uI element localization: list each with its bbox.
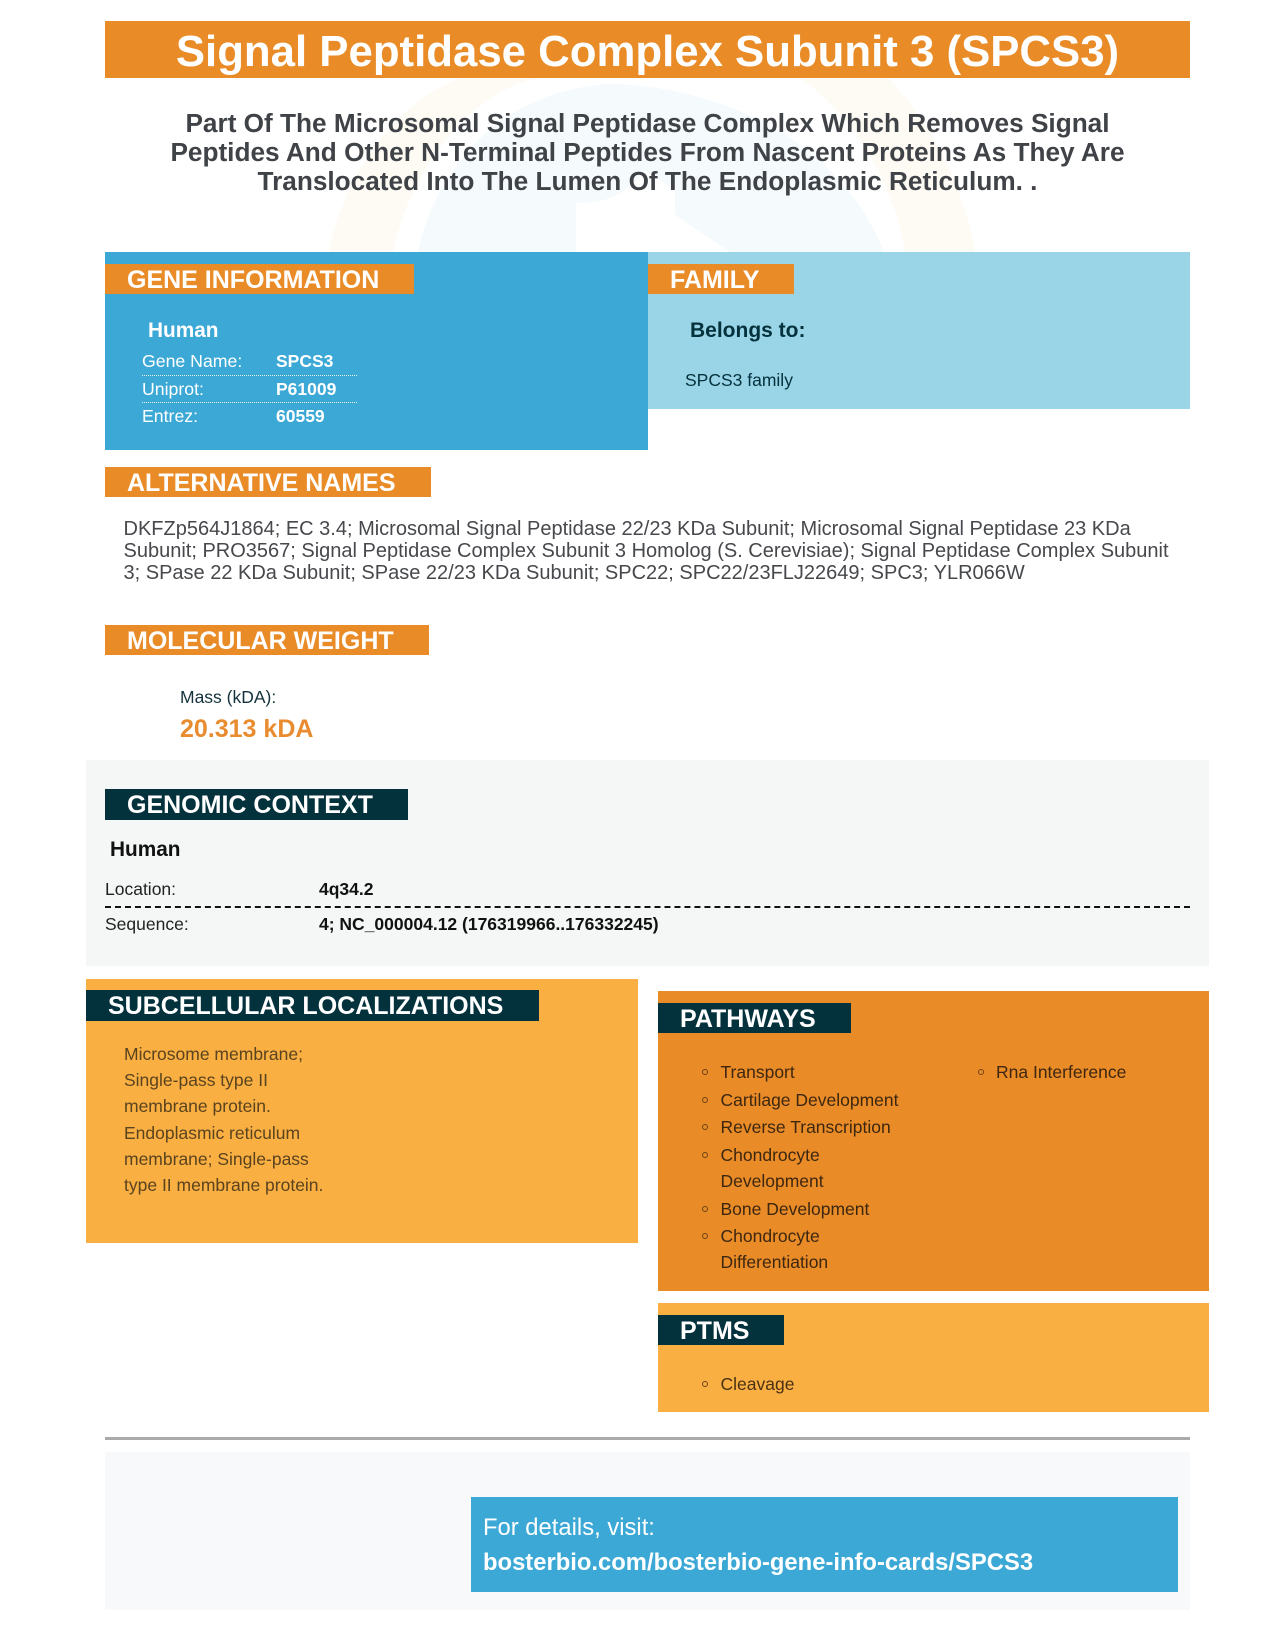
heading: gene information: GENE INFORMATION [127,266,379,294]
ptm list: Cleavage [720,1374,794,1394]
family value: SPCS3 family [685,370,793,390]
subtitle description: Peptides And Other N-Terminal Peptides From Nascent Proteins As They Are [170,137,1125,167]
species label: Human [110,838,180,861]
entrez row: 60559 [276,406,325,426]
entrez row [142,406,325,426]
subtitle description [170,108,1125,196]
pathway list: Reverse Transcription [720,1117,891,1137]
pathway list: Chondrocyte [720,1145,820,1165]
uniprot row [142,376,357,403]
panel: footer [105,1452,1190,1610]
panel: gene information [105,252,648,450]
alternative names text: Subunit; PRO3567; Signal Peptidase Complex Subunit 3 Homolog (S. Cerevisiae); Signal Peptidase Complex Subunit [124,540,1169,562]
location value: 4q34.2 [319,879,373,899]
title banner: Signal Peptidase Complex Subunit 3 (SPCS3) [176,27,1119,76]
pathway list [702,1062,1126,1272]
heading: subcellular localizations: SUBCELLULAR LOCALIZATIONS [108,992,503,1020]
pathway list: Transport [720,1062,795,1082]
subtitle description: Translocated Into The Lumen Of The Endoplasmic Reticulum. . [258,166,1037,196]
heading: alternative names: ALTERNATIVE NAMES [127,469,396,497]
heading: pathways [658,1003,851,1033]
pathway list: Development [720,1171,824,1191]
uniprot row: Uniprot: [142,379,204,399]
entrez row: Entrez: [142,406,198,426]
pathway list: Chondrocyte [720,1226,820,1246]
callout url: bosterbio.com/bosterbio-gene-info-cards/SPCS3 [483,1549,1033,1576]
localization text: membrane protein. [124,1096,271,1116]
location row: Location: [105,879,176,899]
heading: ptms [658,1315,784,1345]
watermark logo [329,78,975,252]
localization text: Microsome membrane; [124,1044,303,1064]
panel: pathways [658,991,1209,1291]
heading: pathways: PATHWAYS [680,1005,816,1033]
sequence value: 4; NC_000004.12 (176319966..176332245) [319,914,659,934]
heading: ptms: PTMS [680,1317,749,1345]
panel: subcellular localizations [86,979,638,1243]
sequence row: Sequence: [105,914,189,934]
localization text: Single-pass type II [124,1070,268,1090]
species label: Human [148,319,218,342]
mass value: 20.313 kDA [180,715,313,743]
alternative names text [124,518,1169,584]
alternative names text: 3; SPase 22 KDa Subunit; SPase 22/23 KDa Subunit; SPC22; SPC22/23FLJ22649; SPC3; YLR066W [124,562,1025,584]
pathway list: Differentiation [720,1252,828,1272]
callout intro text: For details, visit: [483,1514,655,1541]
subtitle description: Part Of The Microsomal Signal Peptidase Complex Which Removes Signal [185,108,1110,138]
pathway list: Rna Interference [996,1062,1126,1082]
callout: details link [471,1497,1178,1592]
localization text: type II membrane protein. [124,1175,323,1195]
heading: family [648,264,794,294]
mass label: Mass (kDA): [180,687,276,707]
panel: ptms [658,1303,1209,1412]
heading: molecular weight: MOLECULAR WEIGHT [127,627,394,655]
localization text: Endoplasmic reticulum [124,1123,300,1143]
panel: family [648,252,1190,409]
pathway list: Bone Development [720,1199,869,1219]
belongs to label: Belongs to: [690,319,806,342]
gene name row: Gene Name: [142,351,242,371]
panel: genomic context [86,760,1209,966]
heading: family: FAMILY [670,266,759,294]
localization text [124,1044,323,1195]
heading: genomic context: GENOMIC CONTEXT [127,791,373,819]
alternative names text: DKFZp564J1864; EC 3.4; Microsomal Signal Peptidase 22/23 KDa Subunit; Microsomal Signal Peptidase 23 KDa [124,518,1131,540]
gene name row: SPCS3 [276,351,333,371]
gene name row [142,348,357,376]
pathway list: Cartilage Development [720,1090,899,1110]
localization text: membrane; Single-pass [124,1149,309,1169]
uniprot row: P61009 [276,379,336,399]
